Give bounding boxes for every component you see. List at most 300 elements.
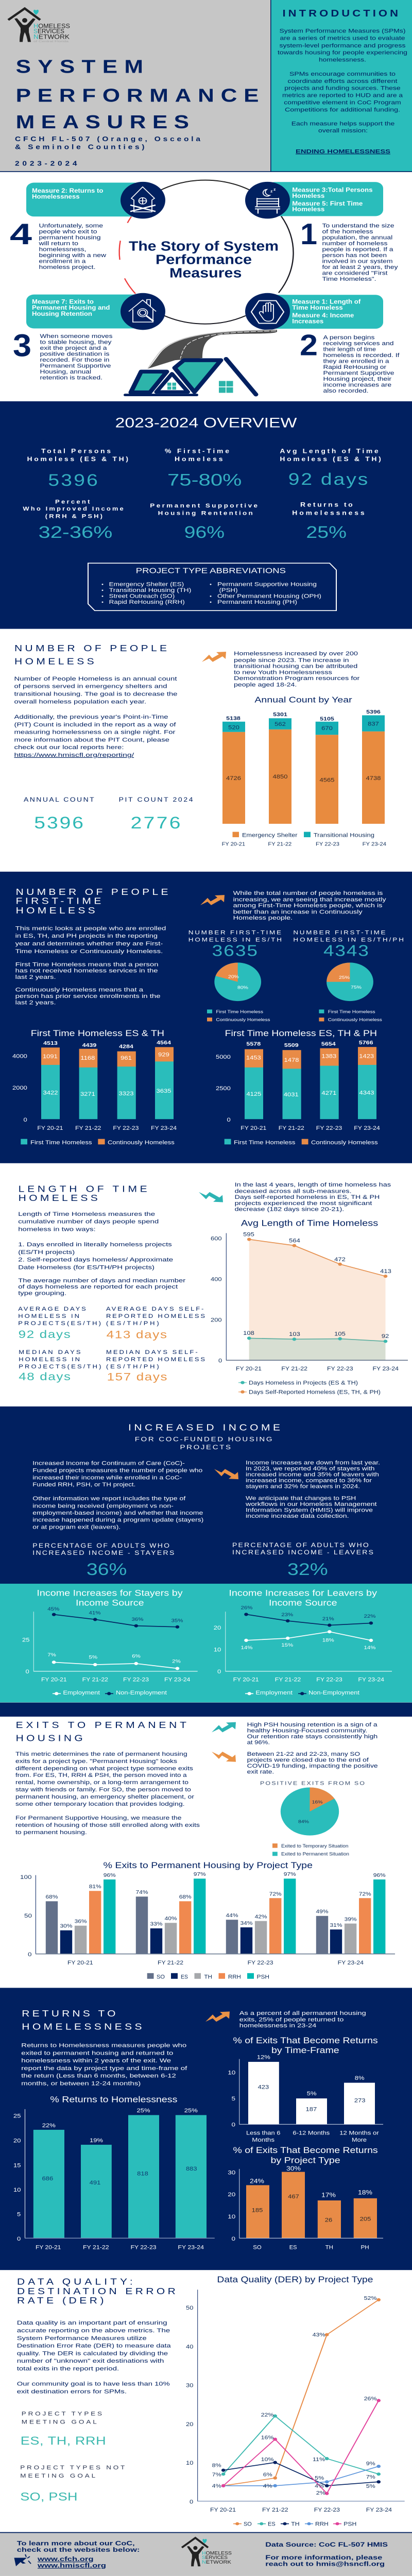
text block xyxy=(14,675,178,758)
bar chart: exits that become returns by time-frame: 6-12 Months xyxy=(293,2130,330,2136)
text block: introduction: competitive element in CoC Program xyxy=(284,99,401,106)
icon: teal down arrow xyxy=(199,1192,223,1202)
heading: the story: Measures xyxy=(169,265,242,281)
line chart: data quality der by project type: 40 xyxy=(186,2343,194,2350)
bar chart: first time homeless es, th and ph: 1383 xyxy=(321,1053,337,1059)
bar chart: first time homeless es, th and ph: First Time Homeless ES, TH & PH xyxy=(225,1028,377,1038)
line chart: data quality der by project type: 10% xyxy=(261,2457,274,2463)
step 3: retention is tracked. xyxy=(40,375,102,381)
text block: increased their income while enrolled in a CoC- xyxy=(32,1474,182,1481)
text block: of days homeless are reported for each project xyxy=(18,1283,178,1290)
bar chart: first time homeless es and th: 4564 xyxy=(157,1040,171,1046)
text block: has not received homeless services in the xyxy=(15,968,158,974)
stat and pie chart: es/th: 20% xyxy=(228,974,239,979)
heading: RETURNS TO xyxy=(22,2009,116,2019)
bar chart: percent returns to homelessness: 883 xyxy=(186,2165,197,2172)
line chart: income increases for leavers: FY 22-23 xyxy=(316,1676,342,1683)
line chart: income increases for leavers: 15% xyxy=(281,1642,293,1648)
logo: Homeless Services Network: NETWORK xyxy=(33,33,70,40)
panel: length of time homeless xyxy=(18,1181,408,1395)
bar chart: percent exits to permanent housing by project type: FY 22-23 xyxy=(248,1959,273,1966)
callout: to new Youth Homelessnesss xyxy=(234,669,332,675)
stat and pie chart: es/th/ph: First Time Homeless xyxy=(328,1009,375,1014)
text block: introduction xyxy=(278,28,407,155)
line chart: income increases for stayers: Non-Employment xyxy=(116,1689,167,1696)
panel: income charts xyxy=(0,1584,412,1717)
stat: median days self-reported: REPORTED HOMELESS xyxy=(106,1356,205,1363)
step 3: to stable housing, they xyxy=(40,339,112,345)
stat and pie chart: es/th: NUMBER FIRST-TIME xyxy=(188,929,281,936)
text block: For Permanent Supportive Housing, we measure the xyxy=(15,1815,182,1821)
text block: The average number of days and median number xyxy=(18,1277,185,1284)
step 3: Housing, annual xyxy=(40,368,91,375)
bar chart: annual count by year: 4738 xyxy=(366,775,381,782)
icon: cursor click xyxy=(14,2554,31,2566)
bar chart: first time homeless es and th: 4284 xyxy=(119,1044,134,1049)
bar chart: exits that become returns by time-frame: 273 xyxy=(354,2097,366,2104)
heading: HOUSING xyxy=(16,1734,83,1743)
stat and pie chart: es/th: 3635 xyxy=(212,942,258,960)
text block: measuring homelessness on a single night. For xyxy=(14,729,175,735)
text block: https://www.hmiscfl.org/reporting/ xyxy=(14,752,134,758)
heading: introduction: INTRODUCTION xyxy=(282,9,398,19)
step 1: of the homeless xyxy=(322,228,373,235)
bar chart: first time homeless es and th: FY 21-22 xyxy=(75,1125,101,1131)
text block: Funded projects measures the number of people who xyxy=(32,1467,202,1473)
step 1: population, the annual xyxy=(322,234,392,241)
text block: or at program exit (leavers). xyxy=(32,1523,121,1530)
text block: 1. Days enrolled in literally homeless projects xyxy=(18,1241,172,1248)
bar chart: first time homeless es and th: 3422 xyxy=(43,1089,58,1096)
bar chart: percent exits to permanent housing by project type: 97% xyxy=(284,1872,296,1877)
stat: stayers xyxy=(32,1542,174,1579)
stat: pit count: 2776 xyxy=(131,814,180,832)
step 3: Permanent Supportive xyxy=(40,363,111,369)
pie chart: positive exits from so: POSITIVE EXITS FROM SO xyxy=(260,1781,365,1786)
text block: more information about the PIT Count, please xyxy=(14,736,169,743)
callout: deceased across all sub-measures. xyxy=(235,1188,352,1194)
text block: introduction: overall mission: xyxy=(318,127,368,134)
text block: introduction: ENDING HOMELESSNESS xyxy=(296,148,390,155)
line chart: income increases for leavers: 14% xyxy=(241,1645,252,1651)
bar chart: first time homeless es, th and ph: FY 20-21 xyxy=(241,1125,267,1131)
stat: annual count: ANNUAL COUNT xyxy=(24,796,94,803)
icon: orange up arrow xyxy=(200,895,225,905)
stat: average days in projects: HOMELESS IN xyxy=(18,1313,79,1319)
line chart: data quality der by project type: 16% xyxy=(261,2435,274,2441)
bar chart: exits that become returns by time-frame: Months xyxy=(252,2137,274,2143)
step 2: income increases are xyxy=(323,382,391,388)
pie chart: positive exits from so: 16% xyxy=(312,1800,323,1805)
line chart: income increases for leavers: 23% xyxy=(281,1612,293,1617)
line chart: income increases for leavers: Income Source xyxy=(269,1598,337,1607)
bar chart: first time homeless es and th: 1091 xyxy=(43,1053,58,1060)
measure 1 and 4 pill: Measure 4: Income xyxy=(292,312,354,319)
line chart: data quality der by project type: 11% xyxy=(313,2457,325,2463)
line chart: income increases for leavers: 0 xyxy=(217,1668,221,1675)
stat: median days self-reported: 157 days xyxy=(107,1371,167,1383)
text block: Number of People Homeless is an annual count xyxy=(14,675,177,682)
panel: header xyxy=(0,0,412,172)
stat: project types not meeting goal: MEETING GOAL xyxy=(20,2472,95,2479)
heading: HOMELESS xyxy=(16,906,95,916)
stat: average days self-reported: (ES/TH/PH) xyxy=(106,1320,159,1327)
measure 3 and 5 pill: Homeless xyxy=(292,192,324,199)
heading: EXITS TO PERMANENT xyxy=(16,1721,186,1730)
text block: check out our local reports here: xyxy=(14,744,124,751)
callout: people aged 18-24. xyxy=(234,682,297,688)
stat: percent first-time homeless: % First-Time xyxy=(165,447,229,454)
heading: HOMELESS xyxy=(14,657,94,667)
bar chart: percent exits to permanent housing by project type: 100 xyxy=(20,1874,32,1880)
text block: First Time Homeless means that a person xyxy=(15,961,159,968)
text block: Length of Time Homeless measures the xyxy=(18,1211,155,1217)
text block: exited to permanent housing and returned to xyxy=(21,2049,173,2056)
project type abbreviations box: Permanent Supportive Housing xyxy=(217,581,317,587)
bar chart: first time homeless es, th and ph: 4125 xyxy=(246,1091,262,1097)
heading: LENGTH OF TIME xyxy=(19,1184,147,1194)
panel: footer xyxy=(0,2532,412,2576)
step 3: recorded. For those in xyxy=(40,357,110,363)
area line chart: avg length of time homeless: FY 23-24 xyxy=(373,1365,399,1372)
bar chart: first time homeless es and th: 4513 xyxy=(43,1041,58,1046)
text block: employment-based income) and whether that income xyxy=(32,1510,203,1516)
measure 1 and 4 pill xyxy=(245,293,383,330)
step 2: receiving services and xyxy=(323,340,394,347)
stat: average days in projects: AVERAGE DAYS xyxy=(18,1306,86,1312)
bar chart: first time homeless es and th: FY 20-21 xyxy=(37,1125,63,1131)
line chart: data quality der by project type: 52% xyxy=(364,2296,377,2301)
project type abbreviations box: Permanent Housing (PH) xyxy=(217,599,297,605)
stat: average length of time homeless: 92 days xyxy=(288,470,368,488)
line chart: income increases for leavers: 10 xyxy=(214,1646,221,1653)
area line chart: avg length of time homeless: 108 xyxy=(243,1330,254,1336)
area line chart: avg length of time homeless: FY 21-22 xyxy=(281,1365,307,1372)
line chart: income increases for leavers: 26% xyxy=(241,1605,252,1611)
callout xyxy=(239,2010,366,2029)
line chart: data quality der by project type: 22% xyxy=(261,2413,274,2418)
callout: increased income and 35% of leavers with xyxy=(246,1471,379,1478)
line chart: data quality der by project type: 5% xyxy=(315,2476,324,2481)
callout: workflows in our Homeless Management xyxy=(245,1501,377,1507)
bar chart: percent exits to permanent housing by project type: 36% xyxy=(75,1919,87,1924)
road to house xyxy=(148,330,277,369)
line chart: data quality der by project type: 7% xyxy=(212,2472,221,2478)
measure 1 and 4 pill: Measure 1: Length of xyxy=(292,298,361,305)
line chart: income increases for stayers: 41% xyxy=(89,1610,100,1616)
step 2: also recorded. xyxy=(323,387,369,394)
callout: exits, 25% of people returned to xyxy=(239,2016,344,2023)
bar chart: percent exits to permanent housing by project type: 49% xyxy=(316,1909,329,1914)
pie chart: positive exits from so xyxy=(260,1781,365,1857)
line chart: income increases for leavers: Employment xyxy=(255,1689,293,1696)
text block: introduction: Competitions for additional funding. xyxy=(285,106,400,113)
callout: Days self-reported homeless in ES, TH & PH xyxy=(235,1194,380,1200)
bar chart: percent returns to homelessness: FY 23-24 xyxy=(178,2244,204,2250)
bar chart: exits that become returns by time-frame: by Time-Frame xyxy=(271,2045,339,2055)
logo: footer: HOMELESS xyxy=(202,2551,232,2556)
stat: returns to homelessness xyxy=(292,501,365,541)
line chart: income increases for stayers: Employment xyxy=(63,1689,100,1696)
bar chart: percent returns to homelessness: FY 22-23 xyxy=(131,2244,157,2250)
heading xyxy=(16,1721,186,1743)
title: SYSTEM xyxy=(16,56,143,77)
stat: percent improved income xyxy=(23,498,124,541)
text block: data source xyxy=(265,2541,388,2567)
bar chart: first time homeless es, th and ph: FY 23-24 xyxy=(354,1125,380,1131)
bar chart: exits that become returns by time-frame: 12% xyxy=(257,2054,270,2060)
house illustration xyxy=(125,359,256,395)
step 3: When someone moves xyxy=(40,333,112,340)
project type abbreviations box: PROJECT TYPE ABBREVIATIONS xyxy=(136,566,286,575)
text block: introduction: system-level performance and progress xyxy=(279,42,405,49)
line chart: data quality der by project type: 7% xyxy=(366,2475,375,2480)
bar chart: annual count by year: 520 xyxy=(228,724,239,731)
step 2: Housing project, their xyxy=(323,376,391,382)
bar chart: exits that become returns by project type: PH xyxy=(360,2244,369,2250)
callout: stayers and 32% for leavers in 2024. xyxy=(246,1483,360,1489)
bar chart: first time homeless es and th: 3271 xyxy=(80,1091,95,1097)
stat: leavers: 32% xyxy=(287,1560,328,1579)
stat: percent improved income: 32-36% xyxy=(38,523,112,541)
line chart: data quality der by project type: SO xyxy=(244,2521,252,2527)
text block: introduction: Each measure helps support the xyxy=(291,121,394,127)
callout: increasing, we are seeing that increase mostly xyxy=(233,896,387,903)
project type abbreviations box: Emergency Shelter (ES) xyxy=(109,581,184,587)
heading xyxy=(22,2009,142,2032)
area line chart: avg length of time homeless: 600 xyxy=(211,1235,222,1242)
line chart: income increases for stayers: Income Source xyxy=(76,1598,144,1607)
panel: exits to permanent housing xyxy=(15,1721,395,1980)
text block: Time Homeless or Continuously Homeless. xyxy=(15,948,163,955)
line chart: income increases for leavers: 18% xyxy=(322,1637,334,1643)
text block: 2. Self-reported days homeless/ Approximate xyxy=(18,1257,173,1263)
icon: orange down arrow xyxy=(212,1752,236,1762)
callout: street outreach xyxy=(247,1751,378,1775)
text block: Additionally, the previous year's Point-in-Time xyxy=(14,714,168,720)
heading: the story xyxy=(129,239,279,281)
stat: median days self-reported xyxy=(106,1349,205,1383)
stat and pie chart: es/th: Continuously Homeless xyxy=(216,1018,270,1023)
heading: HOMELESSNESS xyxy=(22,2022,142,2032)
bar chart: percent exits to permanent housing by project type: 97% xyxy=(194,1872,206,1877)
text block: data source: Data Source: CoC FL-507 HMIS xyxy=(265,2541,388,2548)
bar chart: first time homeless es and th: 3635 xyxy=(157,1088,171,1094)
step 2: Rapid ReHousing or xyxy=(323,364,386,370)
title: PERFORMANCE xyxy=(16,85,259,106)
callout: Income increases are down from last year. xyxy=(246,1460,380,1466)
bar chart: first time homeless es, th and ph: 4031 xyxy=(284,1091,299,1098)
bar chart: percent exits to permanent housing by project type: ES xyxy=(181,1974,188,1980)
icon: orange up arrow xyxy=(202,652,226,662)
area line chart: avg length of time homeless: 400 xyxy=(211,1276,222,1282)
line chart: income increases for stayers xyxy=(22,1588,198,1696)
bar chart: first time homeless es and th: 0 xyxy=(24,1116,27,1123)
callout: Homelessness increased by over 200 xyxy=(234,650,358,657)
bar chart: percent exits to permanent housing by project type: 74% xyxy=(136,1890,148,1895)
bar chart: first time homeless es, th and ph: Continously Homeless xyxy=(311,1139,378,1145)
callout: transitional housing can be attributed xyxy=(234,663,357,669)
stat and pie chart: es/th/ph: HOMELESS IN ES/TH/PH xyxy=(293,937,404,943)
stat and pie chart: es/th/ph xyxy=(293,929,404,1023)
bar chart: exits that become returns by project type: SO xyxy=(253,2244,262,2250)
text block: Increased Income for Continuum of Care (CoC)- xyxy=(32,1460,185,1466)
panel: number of people homeless xyxy=(14,644,386,847)
line chart: income increases for leavers xyxy=(214,1588,392,1696)
text block: Date Homeless (for ES/TH/PH projects) xyxy=(18,1264,154,1270)
panel: first-time homeless xyxy=(0,872,412,1163)
logo: Homeless Services Network: SERVICES xyxy=(33,28,64,35)
bar chart: percent exits to permanent housing by project type: % Exits to Permanent Housing by Project Type xyxy=(103,1860,313,1870)
text block: Continuously Homeless means that a xyxy=(15,987,143,993)
project type abbreviations box: Other Permanent Housing (OPH) xyxy=(217,592,321,599)
bar chart: percent exits to permanent housing by project type: 42% xyxy=(255,1914,267,1920)
callout: While the total number of people homeless is xyxy=(233,890,383,896)
stat and pie chart: es/th: First Time Homeless xyxy=(216,1009,263,1014)
bar chart: exits that become returns by project type: 205 xyxy=(360,2216,371,2222)
bar chart: percent exits to permanent housing by project type: 81% xyxy=(89,1884,101,1890)
bar chart: annual count by year: 5301 xyxy=(273,712,288,718)
bar chart: exits that become returns by time-frame: % of Exits That Become Returns xyxy=(233,2036,378,2045)
measure 3 and 5 pill: Measure 3:Total Persons xyxy=(292,187,372,193)
stat: median days in projects xyxy=(19,1349,101,1383)
project type abbreviations box: Transitional Housing (TH) xyxy=(109,587,191,593)
measure 1 and 4 pill: Time Homeless xyxy=(292,304,343,311)
callout: retention xyxy=(247,1721,377,1745)
project type abbreviations box xyxy=(88,563,336,611)
icon: orange down arrow xyxy=(214,1469,238,1479)
bar chart: first time homeless es and th: FY 23-24 xyxy=(151,1125,177,1131)
callout: retention: Our retention rate stays consistently high xyxy=(247,1733,377,1740)
step 2: homeless is recorded. If xyxy=(323,352,400,359)
text block: homeless in two ways: xyxy=(18,1226,96,1232)
callout: projects experienced the most significant xyxy=(235,1200,372,1207)
callout xyxy=(235,1181,391,1212)
text block: introduction: System Performance Measures (SPMs) xyxy=(279,28,405,34)
pie chart: positive exits from so: 84% xyxy=(298,1819,310,1824)
icon: teal up arrow xyxy=(212,1722,236,1732)
text block: introduction: homelessness. xyxy=(319,56,366,63)
heading: FOR COC-FUNDED HOUSING xyxy=(135,1436,272,1443)
subtitle: CFCH FL-507 (Orange, Osceola xyxy=(15,135,200,143)
callout: street outreach: exit rate. xyxy=(247,1769,274,1775)
callout: retention: at 96%. xyxy=(247,1739,270,1745)
bar chart: percent exits to permanent housing by project type: PSH xyxy=(256,1974,269,1980)
bar chart: annual count by year: FY 21-22 xyxy=(268,841,291,847)
line chart: income increases for stayers: FY 22-23 xyxy=(123,1676,149,1683)
stat: average length of time homeless xyxy=(280,447,381,488)
heading: HOMELESS xyxy=(19,1194,98,1204)
stat: total persons homeless: Homeless (ES & TH) xyxy=(27,455,128,463)
text block: in ES, TH, and PH projects in the reporting xyxy=(15,933,158,939)
links: www.cfch.org xyxy=(37,2555,94,2563)
bar chart: percent exits to permanent housing by project type: 44% xyxy=(226,1913,238,1919)
stat: percent first-time homeless xyxy=(165,447,242,489)
bar chart: exits that become returns by time-frame: 5 xyxy=(231,2095,235,2102)
callout: retention: healthy Housing-Focused community. xyxy=(247,1727,367,1734)
step 2: Permanent Supportive xyxy=(323,370,394,376)
step 4 xyxy=(10,217,106,270)
bar chart: percent exits to permanent housing by project type: 34% xyxy=(241,1921,253,1926)
step 1: involved in our system xyxy=(322,258,392,264)
line chart: data quality der by project type xyxy=(186,2275,405,2527)
text block: introduction: towards housing for people experiencing xyxy=(278,49,407,56)
text block: transitional housing. The goal is to decrease the xyxy=(14,691,178,697)
bar chart: exits that become returns by project type: 185 xyxy=(252,2207,263,2213)
bar chart: percent returns to homelessness: % Returns to Homelessness xyxy=(50,2094,177,2104)
text block: the return (Less than 6 months, between 6-12 xyxy=(21,2073,176,2079)
line chart: data quality der by project type: 20 xyxy=(186,2421,194,2428)
bar chart: annual count by year: 5396 xyxy=(366,709,381,715)
stat: project types not meeting goal: PROJECT TYPES NOT xyxy=(20,2464,125,2471)
line chart: data quality der by project type: ES xyxy=(268,2521,276,2527)
line chart: data quality der by project type: FY 23-24 xyxy=(366,2506,392,2513)
step 3: 3 xyxy=(13,328,31,363)
text block: This metric looks at people who are enrolled xyxy=(15,925,166,931)
callout: Homeless people. xyxy=(233,914,293,921)
bar chart: exits that become returns by project type: by Project Type xyxy=(271,2155,340,2165)
bar chart: first time homeless es, th and ph: First Time Homeless xyxy=(234,1139,296,1145)
measure 3 and 5 pill: z xyxy=(273,188,276,192)
bar chart: exits that become returns by project type: 26 xyxy=(325,2217,333,2223)
bar chart: first time homeless es, th and ph: 5654 xyxy=(321,1042,336,1047)
line chart: income increases for stayers: 35% xyxy=(171,1618,183,1623)
callout: retention: High PSH housing retention is a sign of a xyxy=(247,1721,377,1728)
line chart: data quality der by project type: PSH xyxy=(344,2521,356,2527)
line chart: data quality der by project type: 5% xyxy=(366,2484,375,2489)
text block: to permanent housing. xyxy=(15,1829,87,1836)
bar chart: first time homeless es and th: FY 22-23 xyxy=(113,1125,139,1131)
heading: overview: 2023-2024 OVERVIEW xyxy=(115,415,297,431)
pie chart: positive exits from so: Exited to Temporary Situation xyxy=(281,1844,348,1849)
text block: exit destination errors for SPMs. xyxy=(17,2388,127,2395)
callout: decrease (182 days since 20-21). xyxy=(235,1206,344,1212)
bar chart: first time homeless es, th and ph: 1423 xyxy=(359,1053,374,1059)
stat: leavers: PERCENTAGE OF ADULTS WHO xyxy=(232,1541,369,1549)
bar chart: percent returns to homelessness: 0 xyxy=(17,2235,21,2242)
text block: from. For ES, TH, RRH & PSH, the person moved into a xyxy=(15,1772,187,1778)
stat: psh retention: Housing Rentention xyxy=(158,510,253,516)
bar chart: exits that become returns by project type: 30% xyxy=(286,2165,301,2172)
stat: stayers: 36% xyxy=(87,1560,127,1579)
bar chart: percent exits to permanent housing by project type: 33% xyxy=(150,1921,163,1927)
bar chart: exits that become returns by project type: 18% xyxy=(358,2189,372,2196)
text block: person has prior service enrollments in the xyxy=(15,993,161,999)
heading xyxy=(19,1184,147,1204)
line chart: income increases for stayers: FY 23-24 xyxy=(164,1676,191,1683)
stat: average days self-reported xyxy=(106,1306,205,1341)
bar chart: first time homeless es and th: 4000 xyxy=(12,1053,27,1059)
bar chart: first time homeless es, th and ph: 4271 xyxy=(321,1090,337,1096)
stat: average days in projects xyxy=(18,1306,101,1341)
bar chart: percent returns to homelessness: 19% xyxy=(90,2137,103,2143)
bar chart: first time homeless es and th: 3323 xyxy=(119,1090,134,1097)
bar chart: percent exits to permanent housing by project type: 68% xyxy=(179,1894,192,1900)
text block: data source: reach out to hmis@hsncfl.org xyxy=(265,2560,385,2567)
text block: permanent housing, an emergency shelter placement, or xyxy=(15,1793,194,1800)
text block xyxy=(21,2042,187,2087)
area line chart: avg length of time homeless: 0 xyxy=(218,1357,222,1364)
line chart: income increases for stayers: FY 21-22 xyxy=(82,1676,108,1683)
callout: Information System (HMIS) will improve xyxy=(246,1507,373,1513)
callout: In the last 4 years, length of time homeless has xyxy=(235,1181,391,1188)
step 2: their length of time xyxy=(323,346,376,352)
measure 7 pill: Permanent Housing and xyxy=(32,304,110,311)
bar chart: exits that become returns by time-frame: 5% xyxy=(307,2090,317,2097)
bar chart: percent exits to permanent housing by project type: 72% xyxy=(359,1891,371,1897)
line chart: income increases for stayers: 0 xyxy=(25,1668,29,1675)
callout: better than an increase in Continuously xyxy=(233,908,363,915)
